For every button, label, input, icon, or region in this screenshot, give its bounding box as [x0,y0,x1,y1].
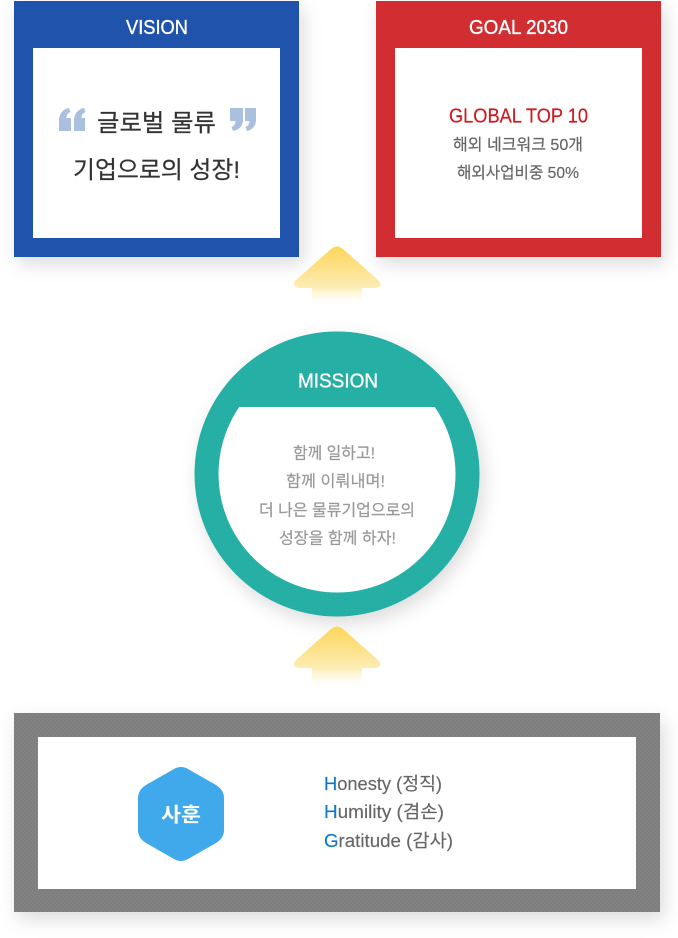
values list: Humility (겸손) [324,802,444,822]
goal text line 2: 해외사업비중 50% [457,164,579,182]
icon: opening quote [59,108,86,131]
values list: Honesty (정직) [324,774,442,794]
badge label: 사훈 [161,804,201,826]
mission text: 성장을 함께 하자! [279,530,396,548]
heading: vision: VISION [126,17,188,39]
icon: hexagon badge [138,767,224,861]
goal text line 1: 해외 네크워크 50개 [453,136,583,154]
goal content box [395,48,642,238]
arrow: values to mission [294,626,381,686]
mission text: 더 나은 물류기업으로의 [259,502,415,520]
icon: closing quote [230,108,256,131]
vision text line 2: 기업으로의 성장! [73,157,240,184]
vision text line 1: 글로벌 물류 [97,110,216,137]
panel: company motto [14,713,660,912]
panel: vision [14,1,299,257]
values list [324,774,453,851]
heading: mission: MISSION [298,370,378,392]
panel: mission [194,332,480,616]
values list: Gratitude (감사) [324,831,453,851]
panel: goal 2030 [376,1,661,257]
motto content box [38,737,636,889]
vision content box [33,48,280,238]
arrow: mission to vision and goal [294,246,381,304]
mission text: 함께 일하고! [293,444,375,462]
goal headline: GLOBAL TOP 10 [449,106,588,128]
mission content area [218,407,456,592]
mission text [259,444,415,548]
heading: goal 2030: GOAL 2030 [469,17,568,39]
mission text: 함께 이뤄내며! [286,472,385,490]
